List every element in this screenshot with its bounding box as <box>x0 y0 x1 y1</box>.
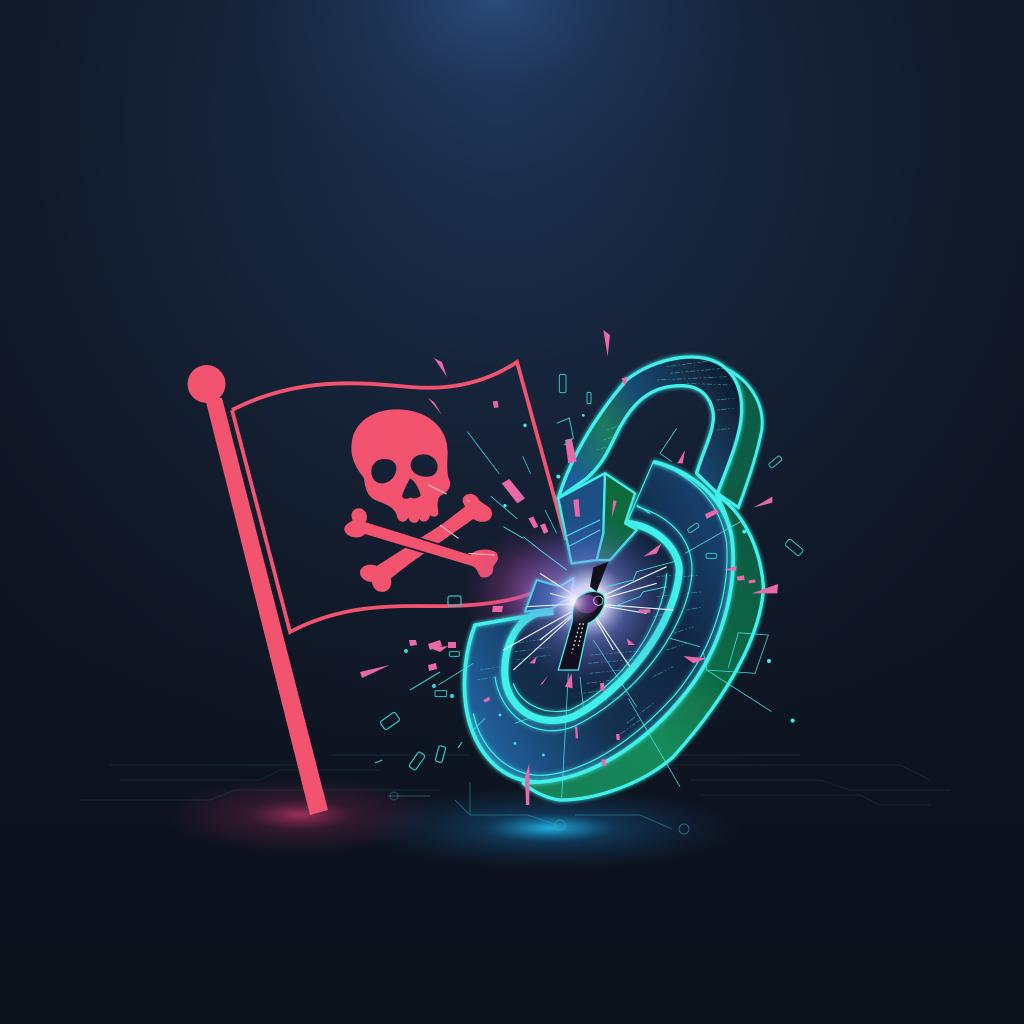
keyhole <box>558 562 608 670</box>
circuit traces on the floor <box>80 755 950 834</box>
thick inner ring <box>505 523 679 721</box>
pink shards over the lock <box>483 330 778 805</box>
shackle data texture <box>597 360 733 450</box>
cyan dots <box>499 414 795 756</box>
shackle back side <box>717 369 762 507</box>
impact rays <box>503 527 680 670</box>
cyan streaks <box>467 432 557 533</box>
lock front face <box>464 462 733 782</box>
cyan chips and dots <box>375 596 462 771</box>
pirate flag <box>188 362 566 815</box>
flag pole <box>188 365 328 815</box>
flying debris on the left <box>360 358 503 771</box>
face data texture <box>477 575 703 737</box>
crack lines across the face <box>438 428 772 798</box>
shackle front band <box>558 357 742 498</box>
cyan outlined chips <box>435 374 804 697</box>
keyhole bloom <box>548 577 598 627</box>
crossbone front <box>343 507 499 578</box>
blast glow on flag corner <box>463 526 607 658</box>
crossbone rear <box>360 494 492 592</box>
floor glow: cyan <box>360 786 740 870</box>
skull <box>351 409 450 523</box>
impact glow <box>502 515 675 688</box>
inner dial plate <box>505 523 678 721</box>
skull and crossbones <box>343 409 499 592</box>
glitch streaks over the bones <box>428 485 495 555</box>
flag cloth outline <box>232 362 566 632</box>
broken upper-left fragment <box>525 462 673 612</box>
floor glow: pink <box>165 777 435 853</box>
lock side wall <box>523 495 763 800</box>
padlock <box>435 330 804 805</box>
face outlines <box>464 462 733 782</box>
pink shards <box>360 358 503 678</box>
